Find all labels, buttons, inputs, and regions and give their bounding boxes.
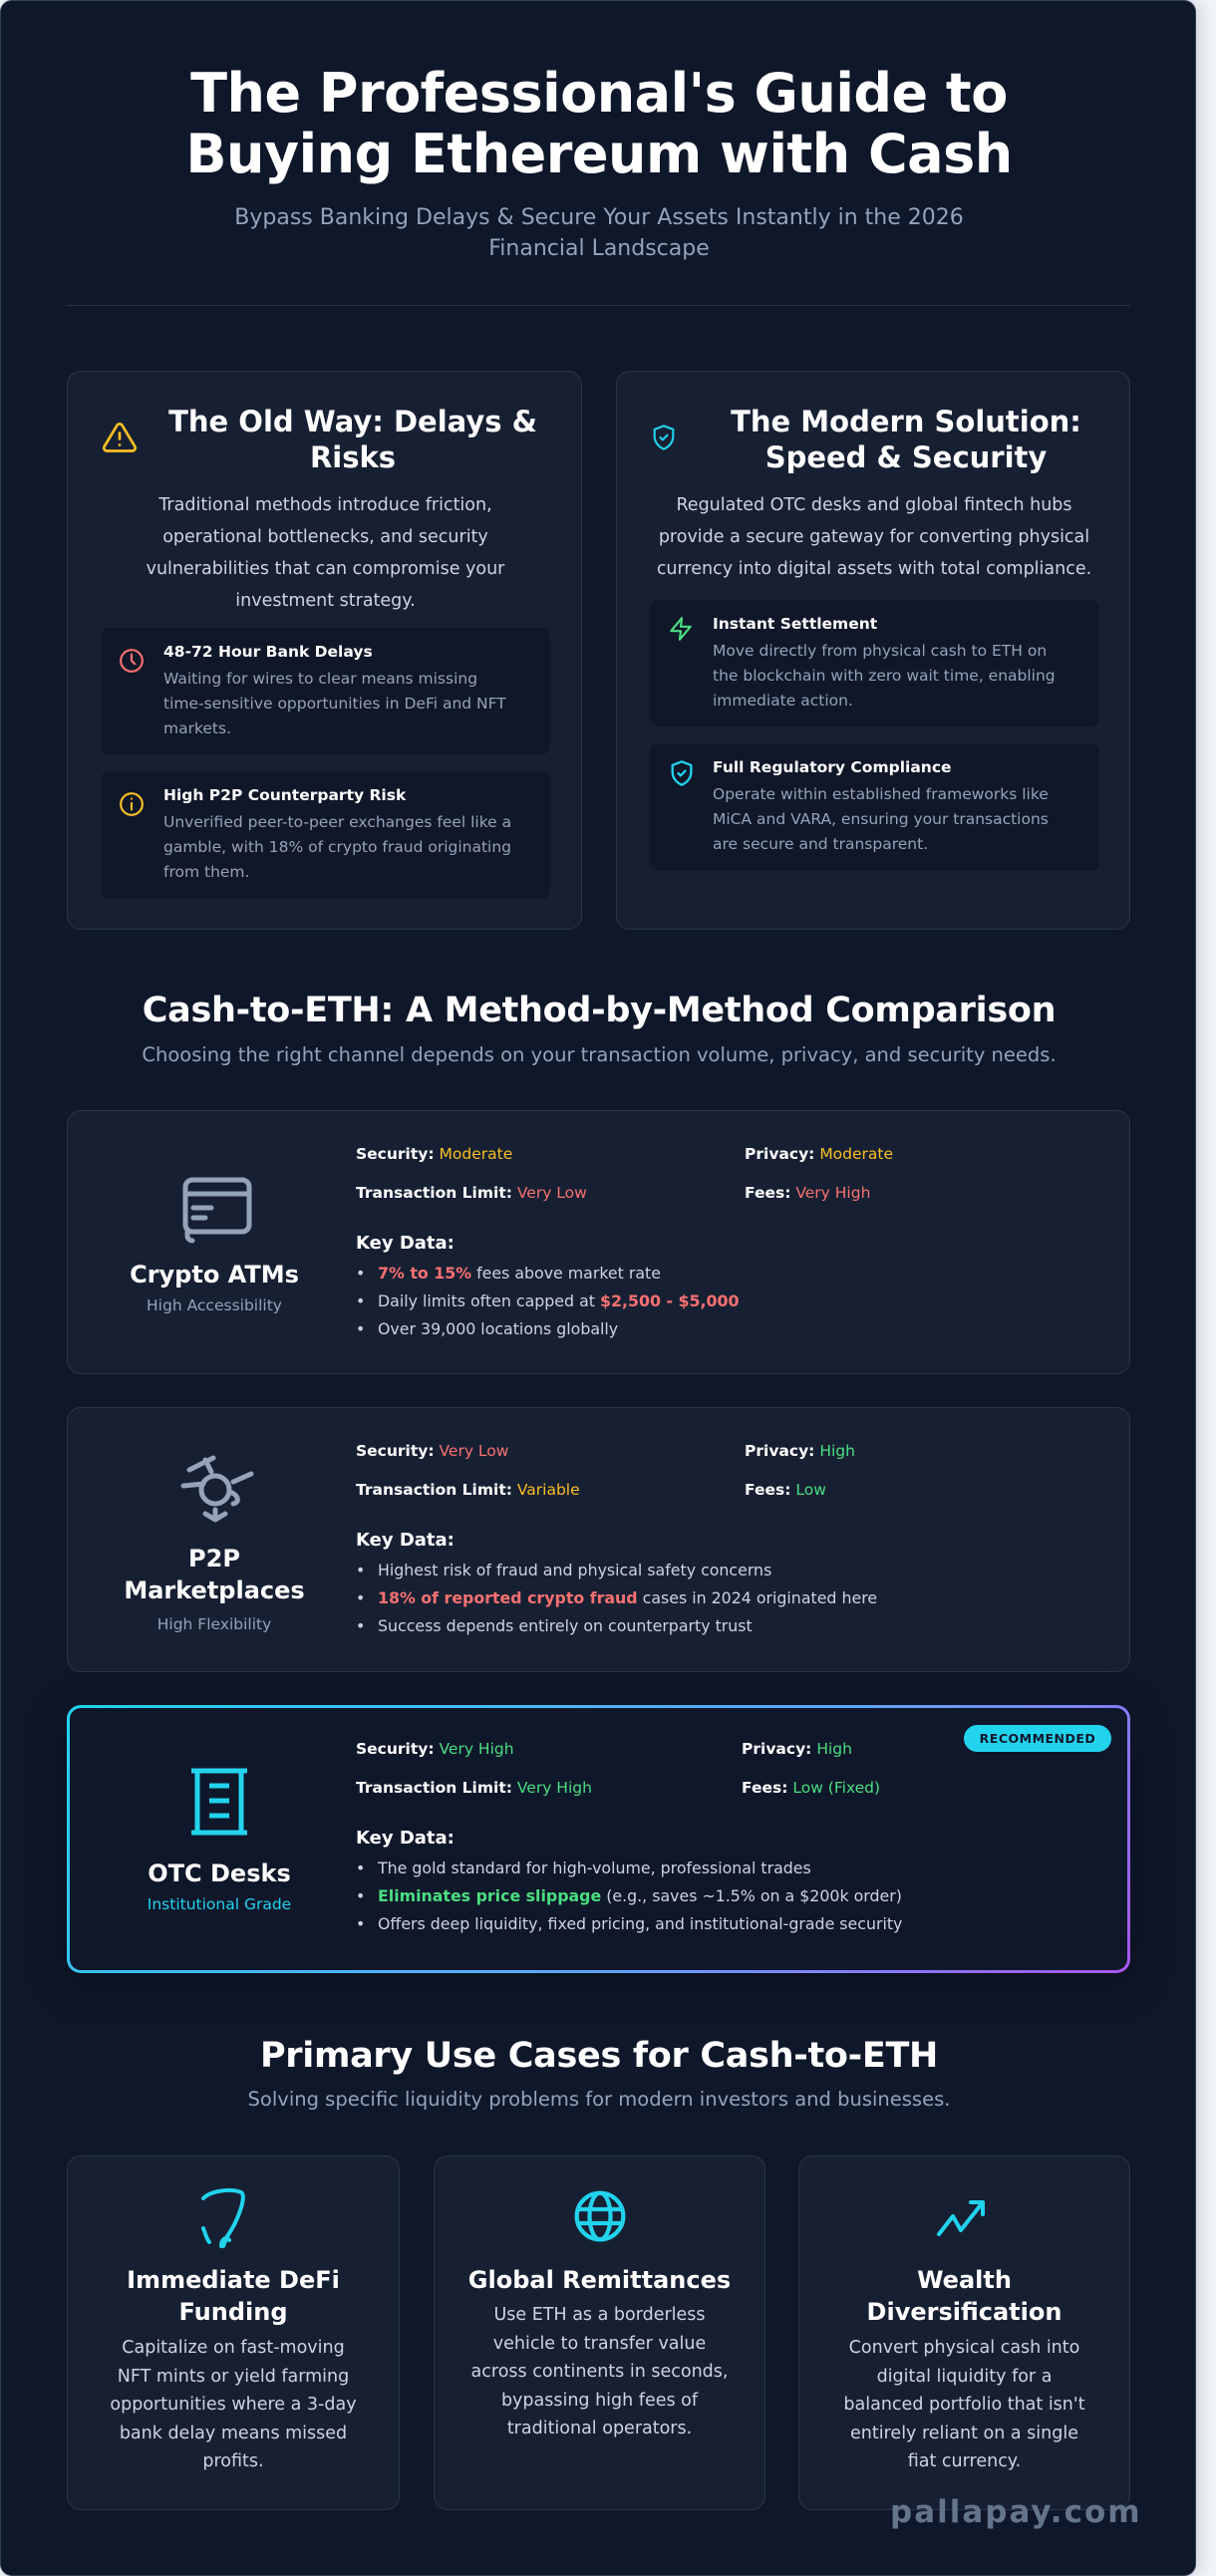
card: OTC desks (recommended): OTC Desks — [148, 1860, 291, 1887]
use case: wealth: Diversification — [867, 2298, 1062, 2326]
heading — [731, 405, 1081, 474]
card: OTC desks (recommended): Security: Very High — [356, 1740, 514, 1758]
item: bank delays: Waiting for wires to clear means missing time-sensitive opportunities in DeFi and NFT markets. — [163, 670, 506, 737]
bullets: 7% to 15% fees above market rate — [378, 1264, 661, 1283]
icon: warning — [102, 423, 138, 452]
item: instant settlement: Move directly from physical cash to ETH on the blockchain with zero wait time, enabling immediate action. — [713, 642, 1056, 710]
card: crypto ATMs: Fees: Very High — [745, 1184, 870, 1202]
card: P2P: P2P — [188, 1545, 240, 1573]
item: p2p risk — [101, 771, 550, 899]
bullets — [358, 1859, 902, 1933]
bullets: Offers deep liquidity, fixed pricing, and institutional-grade security — [378, 1914, 902, 1933]
card: P2P: Privacy: High — [745, 1442, 855, 1460]
use case: remittances — [434, 2155, 765, 2510]
card: OTC desks (recommended): Institutional Grade — [148, 1895, 291, 1913]
heading: The Modern Solution: — [731, 405, 1081, 438]
bullets — [358, 1264, 739, 1338]
card: crypto ATMs: Transaction Limit: Very Low — [356, 1184, 587, 1202]
bullets: Success depends entirely on counterparty trust — [378, 1616, 753, 1635]
subtitle: Financial Landscape — [488, 236, 710, 261]
use case: DeFi — [67, 2155, 400, 2510]
panel: old way — [67, 371, 582, 930]
text: Traditional methods introduce friction, operational bottlenecks, and security vulnerabilities that can compromise your investment strategy. — [147, 495, 504, 611]
title: Buying Ethereum with Cash — [185, 123, 1013, 185]
item: p2p risk: High P2P Counterparty Risk — [163, 786, 406, 804]
item: instant settlement — [650, 600, 1099, 726]
use case: remittances: Use ETH as a borderless — [493, 2305, 706, 2325]
card: crypto ATMs: Key Data: — [356, 1233, 455, 1254]
bullets: Eliminates price slippage (e.g., saves ~1.5% on a $200k order) — [378, 1886, 902, 1905]
subheading: Solving specific liquidity problems for modern investors and businesses. — [248, 2088, 950, 2111]
icon: atm card — [183, 1178, 251, 1244]
card: OTC desks (recommended): Privacy: High — [742, 1740, 852, 1758]
panel: modern solution — [616, 371, 1130, 930]
heading — [168, 405, 537, 474]
text: Regulated OTC desks and global fintech hubs provide a secure gateway for converting physical currency into digital assets with total compliance. — [657, 495, 1091, 579]
item: bank delays: 48-72 Hour Bank Delays — [163, 643, 373, 661]
item: compliance: Full Regulatory Compliance — [713, 758, 952, 776]
icon: building — [191, 1768, 247, 1836]
use case: remittances: bypassing high fees of — [501, 2390, 698, 2410]
title — [185, 62, 1013, 185]
card: crypto ATMs: Crypto ATMs — [130, 1261, 299, 1288]
bullets: 18% of reported crypto fraud cases in 2024 originated here — [378, 1588, 877, 1607]
item: instant settlement: Instant Settlement — [713, 615, 877, 633]
bullets — [358, 1561, 877, 1635]
badge: RECOMMENDED — [980, 1731, 1095, 1746]
use case: wealth: Convert physical cash into digital liquidity for a balanced portfolio that isn't entirely reliant on a single fiat currency. — [843, 2338, 1085, 2471]
icon: globe — [574, 2190, 626, 2242]
card: OTC desks (recommended): Key Data: — [356, 1828, 455, 1849]
icon: rocket — [201, 2188, 245, 2248]
card: crypto ATMs: High Accessibility — [147, 1296, 282, 1314]
bullets: The gold standard for high-volume, professional trades — [378, 1859, 811, 1877]
use case: wealth: Wealth — [917, 2266, 1012, 2294]
heading: Risks — [310, 440, 396, 474]
card: P2P: Key Data: — [356, 1530, 455, 1551]
heading: Speed & Security — [765, 440, 1047, 474]
card: P2P: High Flexibility — [157, 1615, 271, 1633]
item: compliance: Operate within established frameworks like MiCA and VARA, ensuring your transactions are secure and transparent. — [713, 785, 1049, 853]
use case: DeFi: Immediate DeFi — [127, 2266, 340, 2294]
badge — [964, 1725, 1111, 1752]
card: crypto ATMs: Privacy: Moderate — [745, 1145, 893, 1163]
heading: comparison: Cash-to-ETH: A Method-by-Method Comparison — [143, 991, 1056, 1030]
heading: use cases: Primary Use Cases for Cash-to-ETH — [260, 2036, 938, 2076]
bullets: Daily limits often capped at $2,500 - $5,000 — [378, 1291, 739, 1310]
card: crypto ATMs — [67, 1110, 1130, 1374]
card: P2P: Fees: Low — [745, 1481, 826, 1499]
icon: trend up — [937, 2200, 985, 2236]
use case: remittances: vehicle to transfer value — [493, 2334, 706, 2354]
use case: remittances: traditional operators. — [507, 2419, 692, 2438]
title: The Professional's Guide to — [190, 62, 1008, 125]
subheading: Choosing the right channel depends on your transaction volume, privacy, and security needs. — [142, 1043, 1057, 1066]
watermark: pallapay.com — [890, 2494, 1142, 2530]
card: OTC desks (recommended) — [67, 1705, 1130, 1973]
card: P2P: Transaction Limit: Variable — [356, 1481, 580, 1499]
subtitle — [234, 205, 964, 261]
use case: remittances: across continents in seconds, — [471, 2362, 728, 2382]
icon: shield — [654, 425, 674, 450]
use case: DeFi: Capitalize on fast-moving NFT mints or yield farming opportunities where a 3-day bank delay means missed profits. — [110, 2338, 357, 2471]
card: crypto ATMs: Security: Moderate — [356, 1145, 512, 1163]
card: P2P: Security: Very Low — [356, 1442, 508, 1460]
use case: DeFi: Funding — [178, 2298, 288, 2326]
use case: remittances: Global Remittances — [468, 2266, 731, 2294]
subtitle: Bypass Banking Delays & Secure Your Assets Instantly in the 2026 — [234, 205, 964, 230]
item: p2p risk: Unverified peer-to-peer exchanges feel like a gamble, with 18% of crypto fraud originating from them. — [163, 813, 511, 881]
card: P2P: Marketplaces — [124, 1576, 305, 1604]
card: OTC desks (recommended): Transaction Limit: Very High — [356, 1779, 592, 1797]
card: P2P — [67, 1407, 1130, 1672]
card: OTC desks (recommended): Fees: Low (Fixed) — [742, 1779, 880, 1797]
use case: wealth — [798, 2155, 1130, 2510]
bullets: Highest risk of fraud and physical safety concerns — [378, 1561, 771, 1579]
bullets: Over 39,000 locations globally — [378, 1319, 618, 1338]
heading: The Old Way: Delays & — [168, 405, 537, 438]
item: bank delays — [101, 628, 550, 754]
item: compliance — [650, 743, 1099, 871]
icon: p2p — [181, 1455, 253, 1523]
